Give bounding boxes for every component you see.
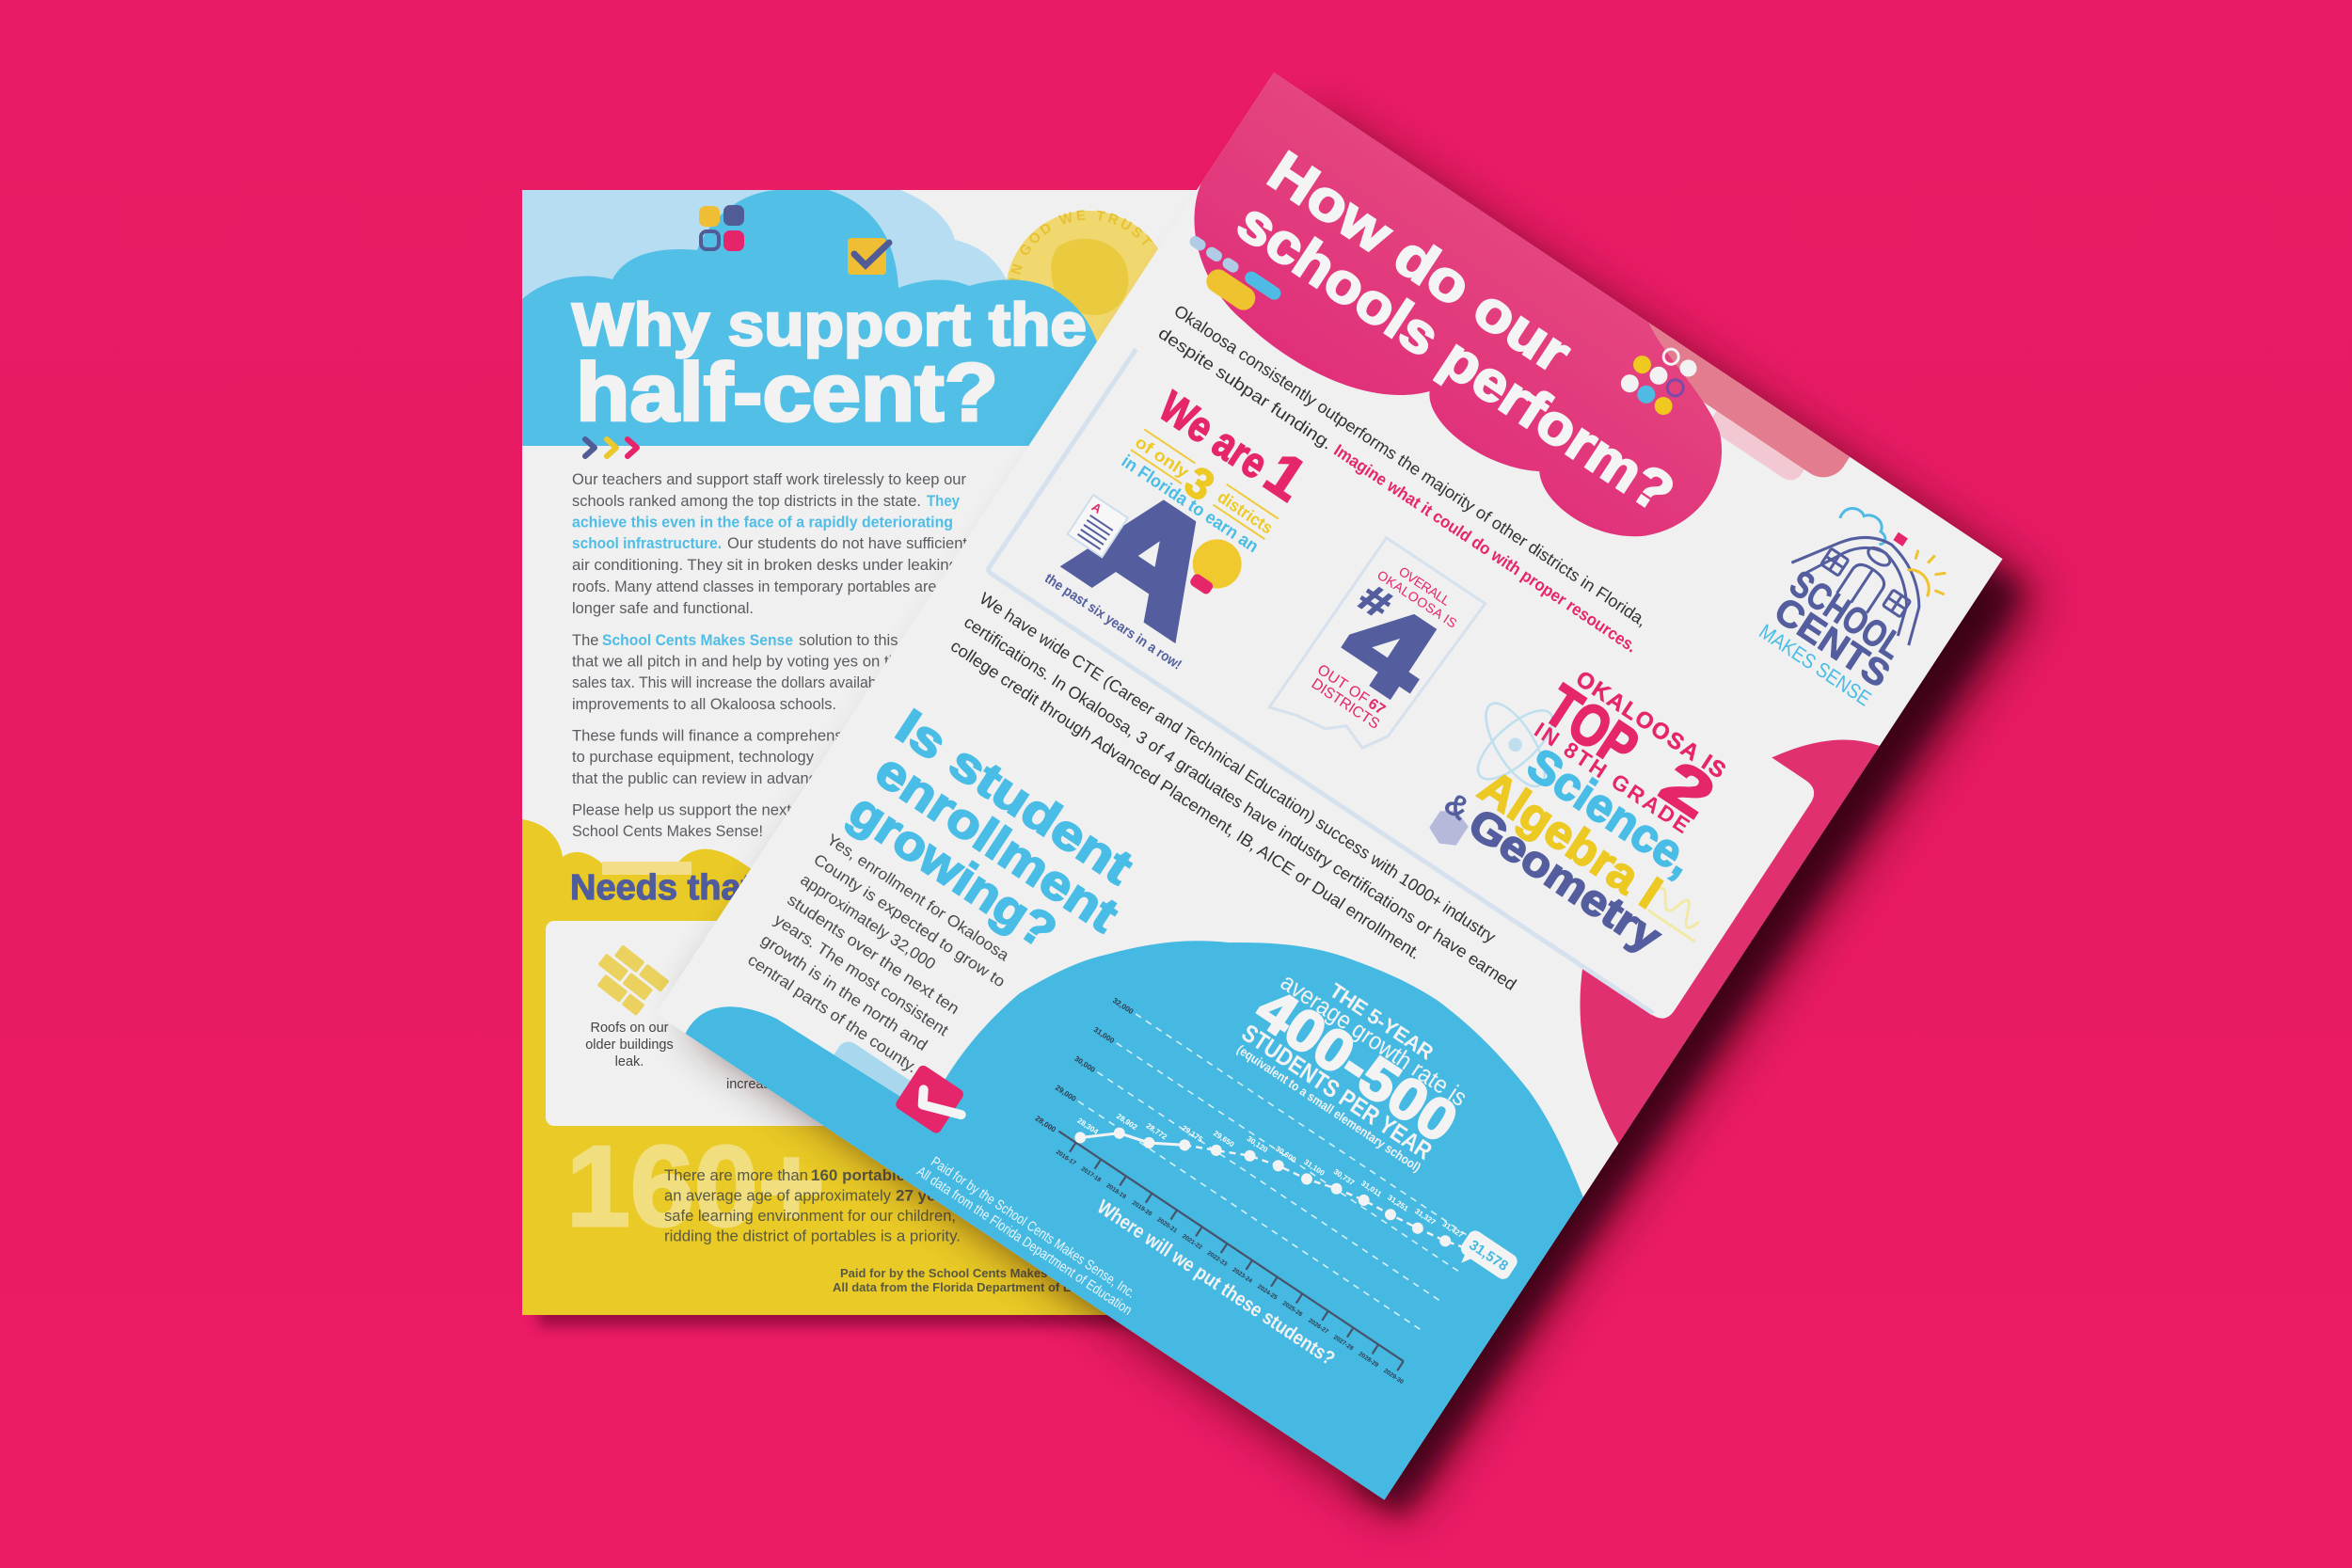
tick labels: 2024-25 bbox=[1256, 1283, 1279, 1302]
stat: top 2 in 8th grade bbox=[1405, 629, 1788, 992]
axis labels: 28,000 bbox=[1034, 1114, 1057, 1134]
data labels: 30,120 bbox=[1246, 1134, 1270, 1154]
back footer bbox=[833, 1268, 1071, 1294]
axis labels bbox=[1034, 996, 1136, 1134]
body copy: roofs. Many attend classes in temporary portables are no bbox=[572, 578, 958, 595]
data labels bbox=[1076, 1019, 1465, 1338]
body copy bbox=[572, 471, 971, 840]
enrollment paragraph bbox=[744, 831, 1022, 1091]
coin illustration bbox=[1007, 210, 1158, 342]
body copy: They bbox=[927, 493, 961, 510]
tick labels: 2021-22 bbox=[1181, 1233, 1203, 1251]
heading: is student enrollment growing: growing? bbox=[839, 783, 1066, 959]
portables text: 27 years bbox=[896, 1187, 960, 1205]
body copy: Our students do not have sufficient bbox=[727, 535, 967, 552]
mockup scene bbox=[522, 72, 2070, 1543]
portables text: safe learning environment for our children, bbox=[664, 1207, 956, 1225]
card frame lines bbox=[987, 348, 1799, 1015]
tick labels bbox=[1055, 1149, 1405, 1386]
stat: overall number 4: OKALOOSA IS bbox=[1375, 567, 1460, 631]
chevrons bbox=[585, 439, 637, 456]
needs heading: Needs that will be met bbox=[570, 868, 946, 908]
stat: overall number 4: OUT OF bbox=[1314, 661, 1372, 707]
icon: document bbox=[1068, 495, 1128, 557]
portables text: There are more than bbox=[664, 1166, 808, 1184]
tick labels: 2028-29 bbox=[1358, 1351, 1380, 1369]
icon: flag bbox=[1893, 532, 1908, 546]
data points bbox=[1073, 1032, 1454, 1346]
body copy: to purchase equipment, technology bbox=[572, 749, 815, 766]
enrollment paragraph: central parts of the county. bbox=[744, 951, 921, 1076]
icon: document: A bbox=[1089, 499, 1104, 516]
back page shadow bbox=[538, 207, 1408, 1326]
data labels: 29,175 bbox=[1181, 1124, 1204, 1144]
heading: is student enrollment growing: Is student bbox=[886, 699, 1142, 895]
body copy: longer safe and functional. bbox=[572, 600, 754, 617]
icon: check box bbox=[848, 238, 889, 275]
decorative dashes bbox=[1173, 232, 1283, 325]
enrollment paragraph: Yes, enrollment for Okaloosa bbox=[823, 831, 1012, 965]
data labels: 28,304 bbox=[1076, 1117, 1100, 1136]
portables text: an average age of approximately bbox=[664, 1187, 891, 1205]
pale tabs bbox=[1613, 294, 1866, 502]
tick labels: 2026-27 bbox=[1307, 1318, 1329, 1336]
icon: wave graph bbox=[1644, 882, 1711, 942]
enrollment paragraph: County is expected to grow to bbox=[810, 850, 1009, 990]
dot cluster icon bbox=[1617, 334, 1700, 419]
stat: overall number 4 bbox=[1269, 535, 1486, 776]
axis labels: 31,000 bbox=[1092, 1025, 1116, 1045]
title: how do our schools perform: How do our bbox=[1258, 139, 1582, 385]
body copy: achieve this even in the face of a rapidly deteriorating bbox=[572, 514, 953, 531]
card caption: older buildings bbox=[585, 1037, 674, 1053]
light band bbox=[602, 862, 691, 875]
stat: overall number 4: OVERALL bbox=[1396, 563, 1454, 609]
gridlines bbox=[1078, 1014, 1480, 1331]
portables text: 160 portables bbox=[811, 1166, 914, 1184]
body copy: that we all pitch in and help by voting yes on the half-cent bbox=[572, 653, 971, 670]
tick labels: 2018-19 bbox=[1104, 1182, 1127, 1200]
logo: school cents makes sense: MAKES SENSE bbox=[1755, 619, 1875, 710]
back footer: Paid for by the School Cents Makes Sense, Inc. bbox=[840, 1266, 1115, 1280]
growth heading: (equivalent to a small elementary school) bbox=[1234, 1042, 1423, 1175]
tick labels: 2016-17 bbox=[1055, 1149, 1077, 1167]
growth heading: STUDENTS PER YEAR bbox=[1237, 1019, 1438, 1165]
data labels: 28,902 bbox=[1115, 1112, 1139, 1132]
title: how do our schools perform: schools perform? bbox=[1227, 190, 1685, 525]
body copy: solution to this crisis is bbox=[799, 632, 953, 649]
pink blob behind stats card bbox=[1512, 674, 1880, 1144]
front page wide shadow bbox=[696, 118, 2037, 1514]
body copy: school infrastructure. bbox=[572, 535, 722, 552]
intro text: despite subpar funding. bbox=[1155, 324, 1336, 453]
enrollment paragraph: students over the next ten bbox=[784, 891, 962, 1018]
yellow footer section bbox=[522, 819, 1106, 1315]
stat: overall number 4: 4 bbox=[1321, 572, 1458, 723]
stat: top 2 in 8th grade: 2 bbox=[1649, 747, 1726, 831]
data labels: 30,737 bbox=[1332, 1167, 1357, 1187]
data labels: 31,011 bbox=[1359, 1179, 1384, 1199]
enrollment paragraph: approximately 32,000 bbox=[797, 870, 939, 974]
portables text bbox=[664, 1166, 961, 1245]
body copy: that the public can review in advance bbox=[572, 770, 825, 787]
body copy: Our teachers and support staff work tirelessly to keep our bbox=[572, 471, 966, 488]
card caption: leak. bbox=[615, 1054, 644, 1069]
icon: pink check bbox=[894, 1064, 973, 1140]
stat: we are 1 of only 3 districts bbox=[1036, 364, 1318, 676]
icon: roof shingles bbox=[597, 944, 669, 1016]
projected line bbox=[1184, 1085, 1470, 1309]
tick labels: 2017-18 bbox=[1080, 1165, 1103, 1184]
title: why support the half-cent: Why support the bbox=[572, 291, 1087, 358]
growth heading: 400-500 bbox=[1245, 975, 1469, 1156]
title: why support the half-cent: half-cent? bbox=[576, 347, 998, 438]
body copy: These funds will finance a comprehensive plan bbox=[572, 728, 897, 745]
icon: cloud bbox=[1839, 500, 1893, 546]
body copy: improvements to all Okaloosa schools. bbox=[572, 696, 836, 713]
back flyer: why support the half-cent bbox=[522, 190, 1197, 1315]
tick labels: 2019-20 bbox=[1131, 1199, 1153, 1218]
stat: top 2 in 8th grade: Geometry bbox=[1460, 799, 1671, 961]
body copy: Please help us support the next bbox=[572, 802, 791, 819]
icon: cube bbox=[1425, 803, 1472, 851]
callout: final value bbox=[1454, 1227, 1520, 1289]
tick labels: 2022-23 bbox=[1206, 1250, 1229, 1268]
icon: atom bbox=[1446, 674, 1585, 815]
axis labels: 32,000 bbox=[1111, 996, 1136, 1016]
front flyer: how do our schools perform bbox=[656, 49, 2018, 1500]
card caption: Roofs on our bbox=[590, 1021, 669, 1036]
stat: we are 1 of only 3 districts: 3 bbox=[1176, 456, 1223, 511]
data labels: 29,650 bbox=[1212, 1129, 1236, 1149]
second caption: increase bbox=[726, 1077, 778, 1092]
icon: four squares bbox=[699, 205, 744, 251]
body copy: School Cents Makes Sense! bbox=[572, 823, 763, 840]
tick labels: 2029-30 bbox=[1382, 1368, 1405, 1386]
stat: overall number 4: DISTRICTS bbox=[1309, 676, 1382, 733]
growth heading bbox=[1231, 951, 1485, 1177]
light cloud bbox=[522, 190, 1007, 299]
front page edge shadow bbox=[1355, 564, 2023, 1516]
stat: top 2 in 8th grade: TOP bbox=[1534, 673, 1649, 781]
stat: overall number 4: 67 bbox=[1365, 696, 1388, 719]
line chart: projected enrollment bbox=[1025, 991, 1520, 1402]
icon: lightbulb bbox=[1179, 530, 1251, 604]
intro text: Okaloosa consistently outperforms the majority of other districts in Florida, bbox=[1170, 301, 1650, 630]
data labels: 28,772 bbox=[1145, 1121, 1168, 1142]
body copy: sales tax. This will increase the dollars available for capital bbox=[572, 674, 957, 691]
axis labels: 30,000 bbox=[1073, 1054, 1097, 1074]
icon: schoolhouse bbox=[1789, 504, 1949, 645]
body copy: schools ranked among the top districts in the state. bbox=[572, 493, 921, 510]
stat: we are 1 of only 3 districts: of only bbox=[1132, 433, 1192, 482]
callout: final value: 31,578 bbox=[1466, 1237, 1511, 1275]
data labels: 31,251 bbox=[1386, 1194, 1410, 1213]
intro text: Imagine what it could do with proper resources. bbox=[1330, 440, 1640, 657]
enrollment paragraph: years. The most consistent bbox=[771, 911, 952, 1039]
stat: top 2 in 8th grade: Science, bbox=[1518, 737, 1704, 886]
cyan cloud header bbox=[522, 190, 1097, 446]
heading: is student enrollment growing: enrollment bbox=[866, 743, 1127, 943]
tick labels: 2023-24 bbox=[1231, 1267, 1253, 1285]
big letter A: A bbox=[1048, 451, 1250, 664]
stat: top 2 in 8th grade: IN 8TH GRADE bbox=[1530, 718, 1694, 838]
stat: we are 1 of only 3 districts: the past six years in a row! bbox=[1041, 570, 1184, 673]
stat: top 2 in 8th grade: & bbox=[1438, 785, 1476, 828]
logo: school cents makes sense bbox=[1745, 491, 1960, 713]
tick labels: 2027-28 bbox=[1332, 1334, 1355, 1353]
logo: school cents makes sense: SCHOOL bbox=[1783, 562, 1910, 667]
front footer: All data from the Florida Department of Education bbox=[914, 1164, 1135, 1319]
data labels: 30,600 bbox=[1274, 1145, 1298, 1164]
back footer: All data from the Florida Department of Education bbox=[833, 1280, 1122, 1294]
growth heading: THE 5-YEAR bbox=[1326, 978, 1438, 1065]
stat: we are 1 of only 3 districts: in Florida to earn an bbox=[1118, 451, 1262, 557]
axis labels: 29,000 bbox=[1054, 1084, 1078, 1103]
stat: we are 1 of only 3 districts: We are bbox=[1151, 382, 1277, 488]
logo: school cents makes sense: CENTS bbox=[1767, 590, 1897, 696]
stat: top 2 in 8th grade: Algebra I bbox=[1470, 760, 1671, 919]
front footer: Paid for by the School Cents Makes Sense, Inc. bbox=[928, 1154, 1138, 1302]
florida outline bbox=[1269, 535, 1486, 776]
data labels: 31,427 bbox=[1441, 1220, 1465, 1240]
cte text: college credit through Advanced Placement, IB, AICE or Dual enrollment. bbox=[947, 636, 1424, 963]
card caption bbox=[585, 1022, 674, 1066]
body copy: School Cents Makes Sense bbox=[602, 632, 793, 649]
title: why support the half-cent bbox=[570, 300, 1086, 423]
heading: is student enrollment growing bbox=[834, 699, 1153, 983]
tick labels: 2025-26 bbox=[1281, 1300, 1304, 1319]
icon: sun bbox=[1899, 546, 1960, 604]
enrollment paragraph: growth is in the north and bbox=[757, 930, 930, 1054]
growth heading: average growth rate is bbox=[1276, 968, 1472, 1112]
cte text: We have wide CTE (Career and Technical Education) success with 1000+ industry bbox=[977, 589, 1499, 946]
pink cloud header bbox=[1149, 72, 1770, 594]
portables text: ridding the district of portables is a priority. bbox=[664, 1227, 961, 1245]
needs card bbox=[546, 921, 824, 1126]
body copy: The bbox=[572, 632, 598, 649]
stat: we are 1 of only 3 districts: districts bbox=[1215, 487, 1277, 538]
actual line bbox=[1080, 1094, 1184, 1188]
big number 160+: 160+ bbox=[566, 1122, 825, 1250]
chart question: Where will we put these students? bbox=[1093, 1196, 1339, 1370]
data labels: 31,100 bbox=[1302, 1158, 1327, 1178]
data labels: 31,327 bbox=[1413, 1207, 1438, 1227]
stats card bbox=[988, 337, 1820, 1023]
stat: top 2 in 8th grade: OKALOOSA IS bbox=[1571, 666, 1730, 784]
body copy: air conditioning. They sit in broken desks under leaking bbox=[572, 557, 958, 574]
tick labels: 2020-21 bbox=[1155, 1216, 1179, 1235]
cyan chart area bbox=[685, 661, 1629, 1500]
stat: we are 1 of only 3 districts: 1 bbox=[1253, 438, 1318, 514]
cte text: certifications. In Okaloosa, 3 of 4 graduates have industry certifications or have earned bbox=[961, 612, 1519, 994]
stat: overall number 4: # bbox=[1351, 575, 1399, 627]
axis and ticks bbox=[1053, 1132, 1404, 1370]
coin illustration: IN GOD WE TRUST bbox=[1009, 210, 1152, 280]
light tab bbox=[824, 1037, 931, 1126]
